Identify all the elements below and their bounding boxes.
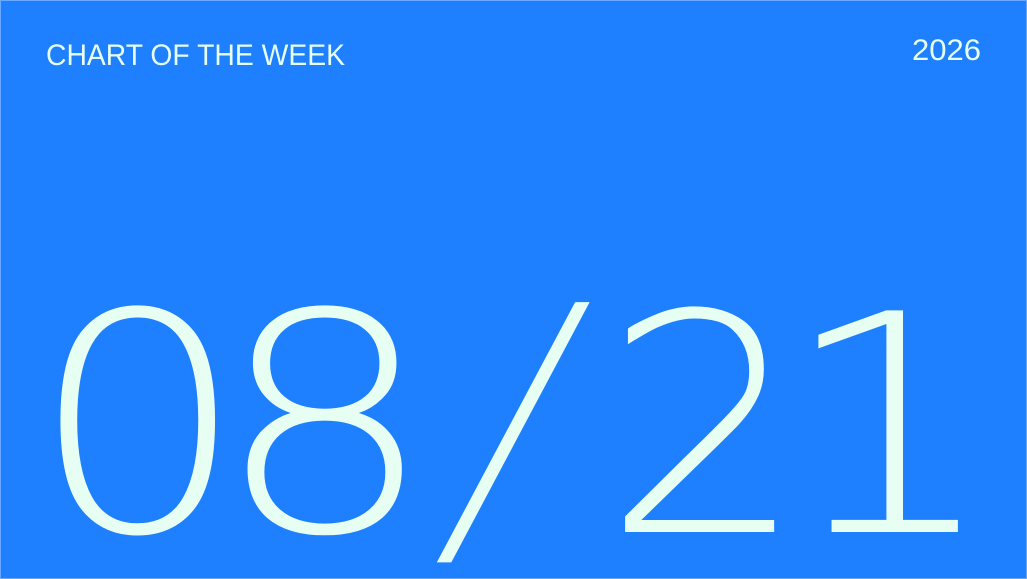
year label: 2026 [912,34,981,67]
